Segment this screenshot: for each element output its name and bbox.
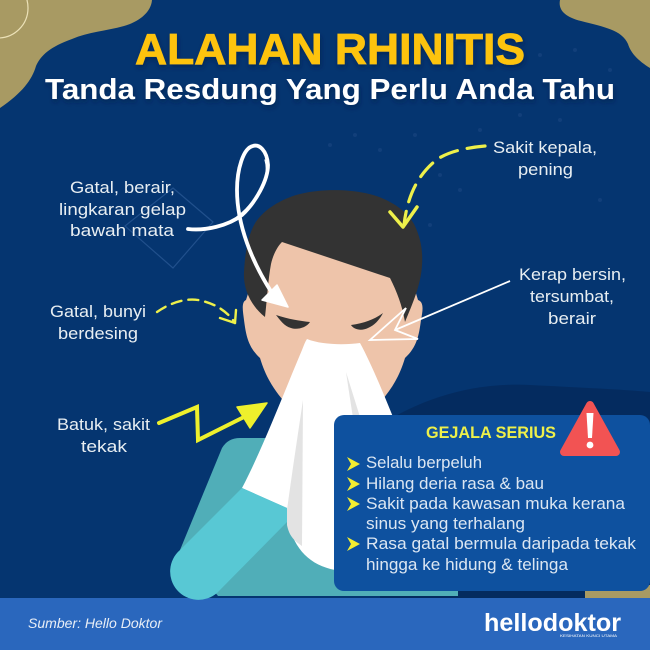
label: nose: tersumbat, <box>530 287 614 306</box>
label: nose <box>519 265 626 328</box>
icon: warning triangle <box>564 405 616 452</box>
face and ears <box>243 240 423 408</box>
label: nose: berair <box>548 309 596 328</box>
body lower extension <box>330 560 458 596</box>
tissue fold left <box>287 400 303 546</box>
blob: top left <box>0 0 152 108</box>
label: eyes <box>59 178 186 240</box>
source: Sumber: Hello Doktor <box>28 615 163 631</box>
sleeve arm <box>170 488 287 600</box>
label: ears: berdesing <box>58 324 138 343</box>
title: ALAHAN RHINITIS <box>135 25 525 74</box>
label: eyes: bawah mata <box>70 221 175 240</box>
arrow: dashed yellow to ear <box>157 300 236 323</box>
person illustration <box>170 190 458 600</box>
label: eyes: lingkaran gelap <box>59 200 186 219</box>
subtitle: Tanda Resdung Yang Perlu Anda Tahu <box>45 74 615 106</box>
decorative dots <box>328 38 612 227</box>
arrow: white loop to eyes <box>188 146 288 307</box>
arrowhead <box>262 285 288 307</box>
bullets <box>347 457 360 551</box>
tan corner bottom right <box>585 585 650 598</box>
label: ears <box>50 302 146 343</box>
left eye <box>276 315 310 329</box>
arrow: zigzag yellow to throat <box>159 403 267 440</box>
blob: top right <box>560 0 650 68</box>
list text: Sakit pada kawasan muka kerana <box>366 495 626 513</box>
label: ears: Gatal, bunyi <box>50 302 146 321</box>
list text: Hilang deria rasa & bau <box>366 475 544 493</box>
arrowhead <box>237 403 267 428</box>
body <box>180 438 345 596</box>
arrow: dashed yellow to head <box>390 146 485 227</box>
label: throat: tekak <box>81 437 128 456</box>
heading: GEJALA SERIUS <box>426 423 556 442</box>
label: throat: Batuk, sakit <box>57 415 150 434</box>
label: head: Sakit kepala, <box>493 138 597 157</box>
diamond outline <box>125 188 213 268</box>
footer band <box>0 598 650 650</box>
list text <box>366 454 637 574</box>
dark blob behind panel <box>380 385 650 600</box>
list text: sinus yang terhalang <box>366 515 525 533</box>
arrow: white paper arrow to nose <box>370 281 510 340</box>
tissue fold right <box>346 372 360 418</box>
label: throat <box>57 415 150 456</box>
label: eyes: Gatal, berair, <box>70 178 175 197</box>
ring: top left <box>0 0 28 38</box>
list text: Rasa gatal bermula daripada tekak <box>366 535 637 553</box>
list text: hingga ke hidung & telinga <box>366 556 569 574</box>
hair <box>244 190 422 322</box>
list text: Selalu berpeluh <box>366 454 482 472</box>
label: head: pening <box>518 160 573 179</box>
right eye <box>351 313 383 330</box>
label: head <box>493 138 597 179</box>
logo: hellodoktor <box>484 609 621 637</box>
panel: gejala serius <box>334 405 650 591</box>
tissue <box>242 339 400 570</box>
logo: KESIHATAN KUNCI UTAMA <box>560 633 617 638</box>
label: nose: Kerap bersin, <box>519 265 626 284</box>
